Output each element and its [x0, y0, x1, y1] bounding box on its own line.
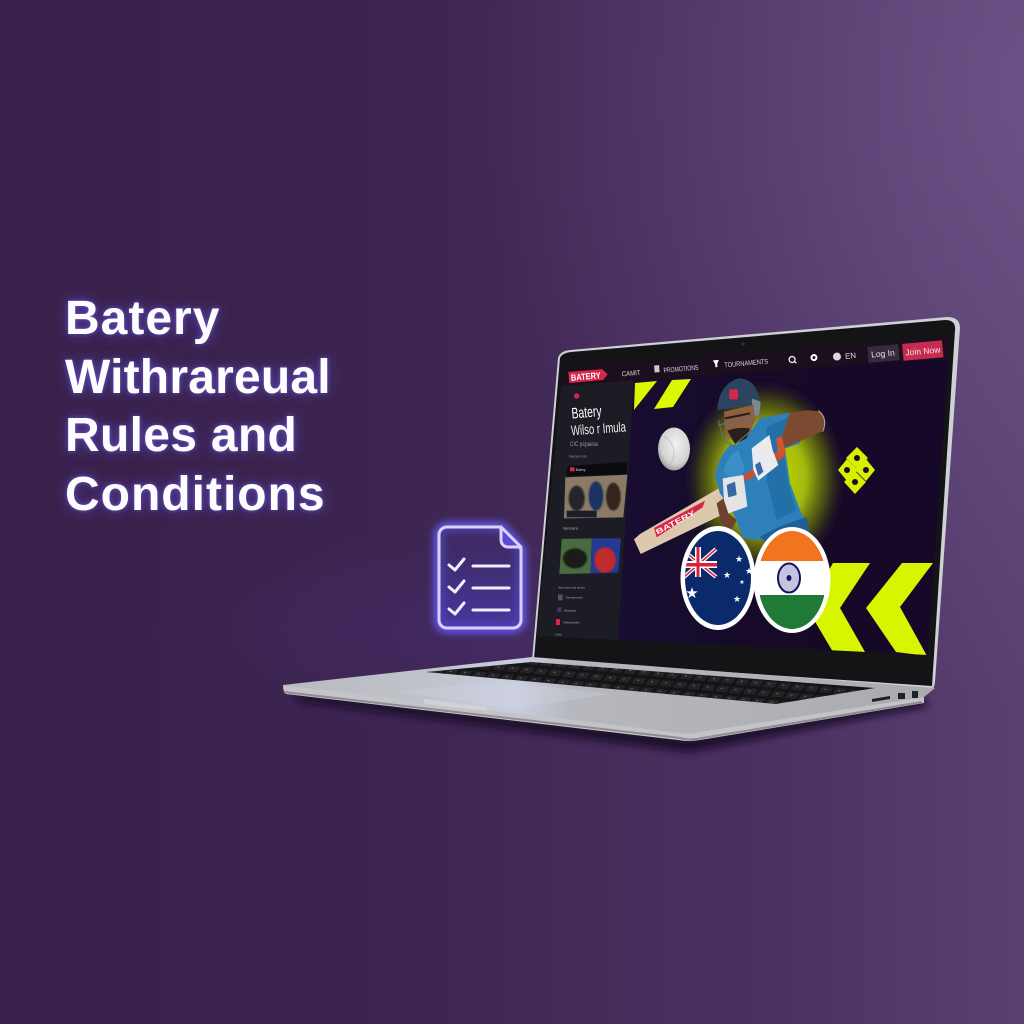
header bar: EN	[845, 351, 857, 361]
laptop base	[283, 657, 935, 741]
left arm	[717, 498, 737, 529]
sidebar heading: Batery	[571, 403, 602, 423]
australia flag	[680, 526, 756, 630]
title: Rules and	[65, 409, 297, 462]
header bar	[561, 337, 950, 390]
sidebar card one: Batery	[576, 468, 586, 472]
cricket ball	[658, 428, 690, 470]
sidebar card two	[559, 538, 621, 574]
cricketer	[715, 378, 825, 543]
india flag	[754, 527, 830, 635]
australia flag: ★	[735, 554, 743, 564]
laptop	[283, 317, 960, 741]
title	[60, 292, 334, 520]
camera	[741, 342, 745, 346]
face	[724, 405, 755, 444]
notch	[424, 699, 487, 711]
sidebar content: Bessara	[563, 525, 579, 530]
shirt	[715, 413, 808, 540]
australia flag: ★	[733, 594, 741, 604]
title: Batery	[65, 292, 220, 345]
bottom glove	[723, 475, 747, 513]
ashoka chakra	[778, 564, 800, 592]
globe icon	[833, 352, 841, 360]
diamond icon	[838, 447, 875, 494]
australia flag: ★	[739, 579, 745, 586]
screen bezel	[534, 320, 955, 686]
join now button	[902, 340, 943, 361]
cricket bat	[634, 487, 725, 554]
sidebar list: Help	[555, 633, 562, 637]
bat handle	[743, 449, 786, 482]
laptop lid	[532, 317, 960, 692]
australia flag: ★	[685, 585, 699, 602]
log in button	[867, 344, 900, 363]
logo: BATERY	[570, 370, 601, 383]
sidebar list: Tournaments	[565, 596, 583, 600]
australia flag: ★	[723, 570, 731, 580]
cricket bat: BATERY	[654, 508, 697, 536]
header bar: PROMOTIONS	[663, 365, 699, 375]
yellow glow	[690, 386, 840, 566]
title: Conditions	[65, 468, 326, 520]
laptop shadow	[292, 692, 928, 752]
header bar: TOURNAMENTS	[724, 359, 769, 369]
keyboard	[426, 662, 875, 704]
chevrons	[807, 563, 933, 656]
front edge	[283, 685, 924, 741]
sidebar list: Wordpay	[564, 608, 576, 612]
helmet cage	[718, 418, 752, 446]
sidebar	[530, 377, 634, 640]
trackpad	[400, 681, 610, 709]
sidebar list: Bonuses and prizes	[559, 585, 585, 589]
sidebar list	[555, 585, 585, 637]
sidebar content	[555, 393, 627, 637]
sidebar content: Barouni lolir	[569, 455, 588, 459]
sidebar content: CIC pcpairas	[570, 442, 598, 448]
slashes	[634, 379, 691, 410]
sidebar subheading: Wilso r Imula	[570, 419, 627, 438]
log in button: Log In	[871, 348, 895, 360]
icon: checklist document	[439, 527, 521, 628]
sidebar list: Withdrawals	[563, 620, 580, 624]
gear icon	[811, 355, 817, 360]
search icon	[789, 356, 796, 364]
ports	[872, 691, 918, 702]
base top	[283, 657, 935, 738]
top glove	[752, 435, 778, 481]
header bar: CAMIT	[621, 370, 642, 378]
wrist band	[776, 436, 786, 457]
join now button: Join Now	[905, 344, 942, 358]
australia flag: ★	[745, 566, 753, 576]
sidebar card one	[564, 462, 627, 518]
helmet	[717, 378, 761, 411]
laptop display	[530, 337, 950, 656]
title: Withrareual	[65, 350, 331, 404]
right arm	[780, 410, 825, 447]
